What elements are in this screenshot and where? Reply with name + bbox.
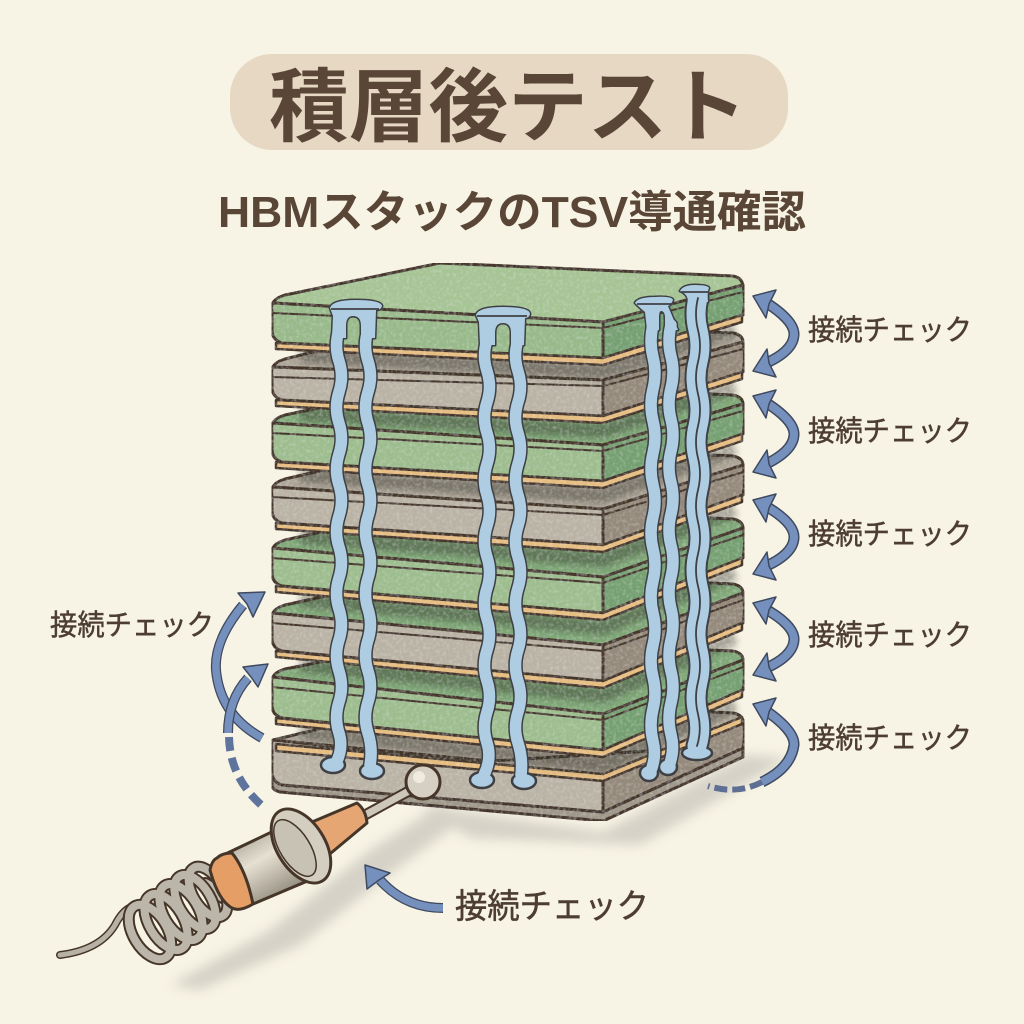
probe tip ball: [406, 765, 440, 799]
grip body: [217, 828, 317, 904]
TSV pool rims: [331, 292, 708, 316]
title pill: [230, 54, 788, 152]
arrows: right side: [708, 290, 794, 790]
TSV conductors: [321, 285, 712, 789]
orange cone: [312, 803, 367, 858]
labels: connection check: 接続チェック: [808, 415, 972, 448]
arrows: left side: [216, 592, 268, 809]
dashed arrow tail: [708, 782, 762, 790]
layer 5: green: [272, 506, 744, 628]
rod: [365, 786, 418, 815]
arrow: bottom: [365, 865, 443, 908]
layer 1: green top: [272, 263, 744, 372]
layer 6: gray: [272, 571, 744, 696]
TSV bulbs: [321, 746, 712, 789]
base layer: gray: [272, 700, 744, 821]
arrow heads: [753, 290, 776, 726]
TSV pool outlines: [330, 285, 709, 345]
labels: connection check: 接続チェック: [808, 314, 972, 347]
subtitle: HBMスタックのTSV導通確認: [218, 188, 806, 237]
chip stack: [272, 263, 744, 821]
TSV centre line: [696, 298, 700, 746]
layer 4: gray: [272, 443, 744, 560]
TSV pipe fills: [335, 298, 700, 775]
labels: connection check: [50, 314, 972, 755]
labels: connection check: 接続チェック: [808, 518, 972, 551]
probe: [60, 765, 440, 966]
layer 3: green: [272, 382, 744, 496]
title: 積層後テスト: [269, 63, 747, 152]
TSV pool fills: [330, 285, 709, 345]
coil and wire: [60, 860, 235, 966]
labels: connection check: 接続チェック: [808, 722, 972, 755]
collar disc: [259, 799, 343, 893]
ground shadows: [170, 755, 790, 990]
labels: connection check: 接続チェック: [808, 619, 972, 652]
orange band: [210, 853, 253, 909]
TSV pipe outlines: [335, 298, 700, 775]
label: bottom: 接続チェック: [455, 888, 649, 926]
layer 7: green: [272, 638, 744, 765]
labels: connection check: 接続チェック: [50, 609, 214, 642]
layer 2: gray: [272, 320, 744, 431]
